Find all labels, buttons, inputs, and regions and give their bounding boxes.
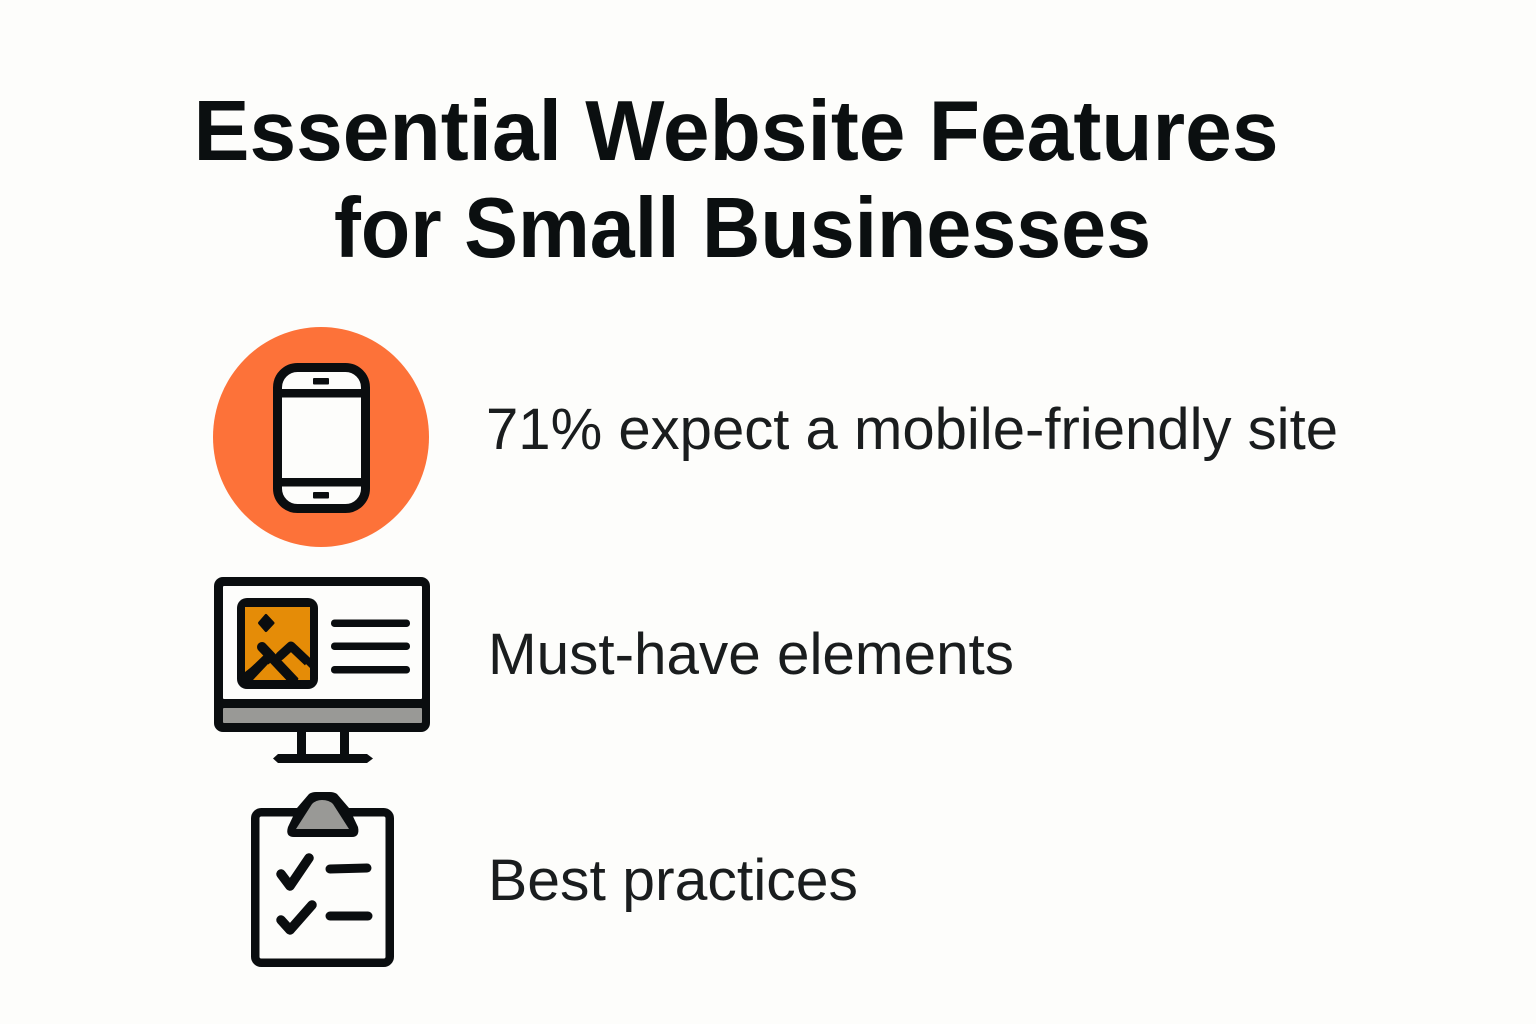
title: for Small Businesses xyxy=(334,181,1151,276)
text: best practices: Best practices xyxy=(488,848,858,913)
title xyxy=(194,84,1278,276)
text: mobile statistic: 71% expect a mobile-friendly site xyxy=(486,397,1338,462)
icon: mobile phone in orange circle xyxy=(213,327,429,547)
icon: clipboard checklist xyxy=(255,792,390,963)
text: must-have elements: Must-have elements xyxy=(488,622,1014,687)
icon: desktop monitor with image and text lines xyxy=(214,577,430,763)
title: Essential Website Features xyxy=(194,84,1278,179)
